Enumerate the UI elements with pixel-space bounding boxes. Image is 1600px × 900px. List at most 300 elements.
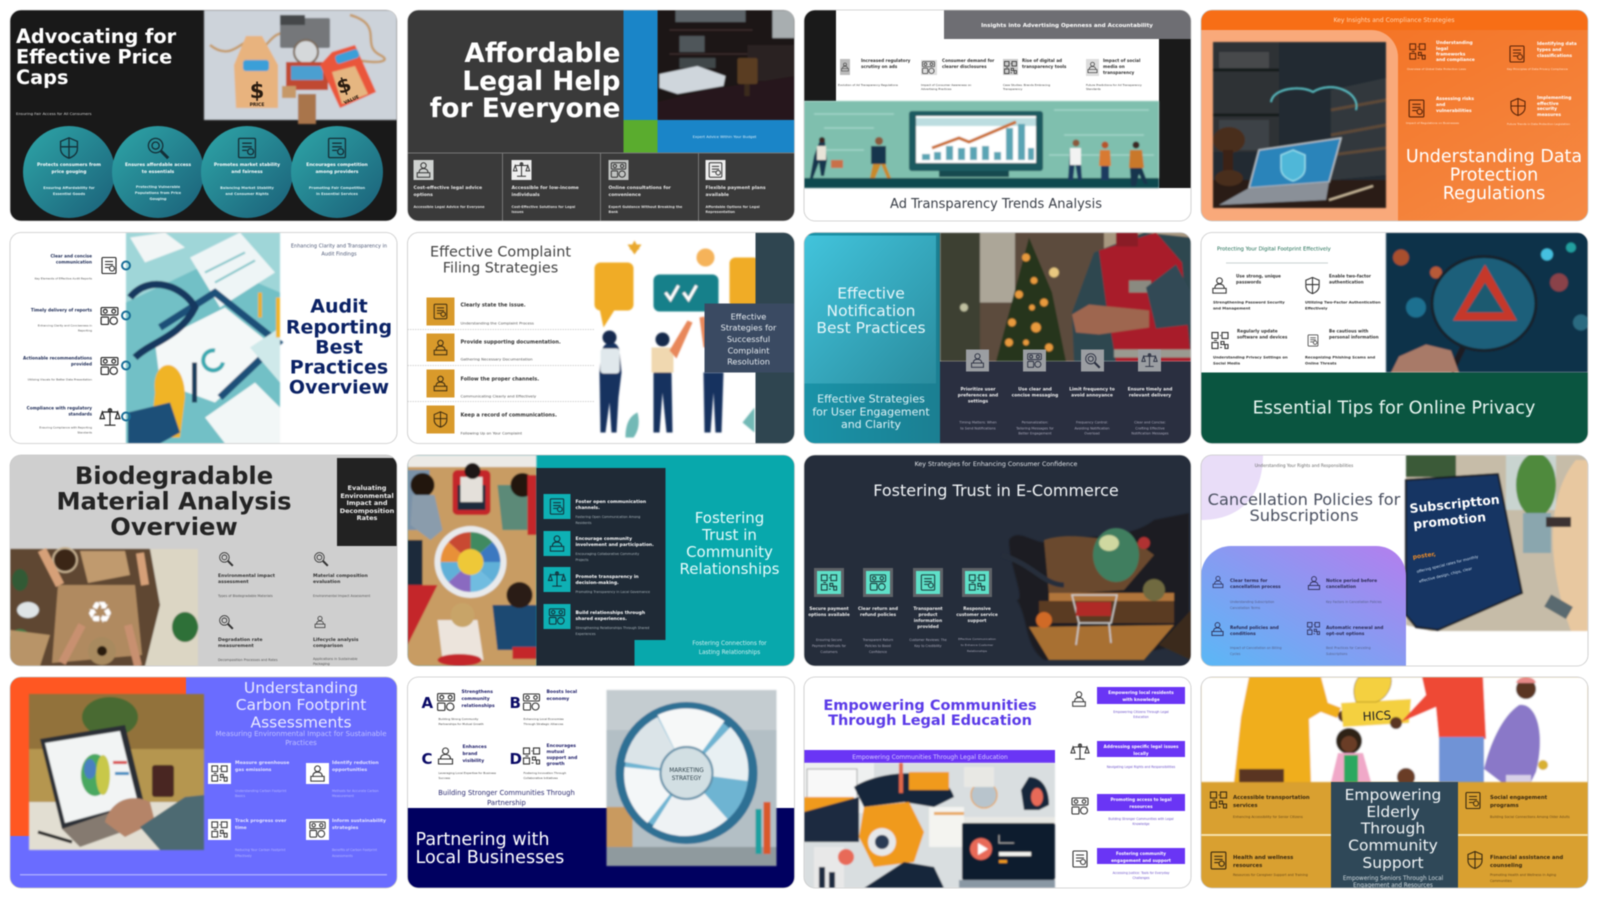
item: consumer demand <box>921 58 995 91</box>
subtitle: Expert Advice Within Your Budget <box>693 134 757 139</box>
item: environmental assessment: Environmental impact <box>218 573 276 579</box>
item: risks: and <box>1436 102 1445 108</box>
item: shared experiences: Experiences <box>576 632 596 636</box>
subtitle: Effective Strategies <box>817 392 925 406</box>
title: Audit <box>310 296 368 318</box>
item C: brand visibility: brand <box>462 751 477 757</box>
item: social media: Standards <box>1086 87 1101 91</box>
header band <box>944 10 1191 39</box>
item: communication channels: Fostering Open Communication Among <box>576 515 640 519</box>
item: payment plans: Affordable Options for Legal <box>706 205 760 209</box>
item: timely delivery: Enhancing Clarity and Conciseness in <box>38 324 92 328</box>
panel: Effective Notification Best Practices <box>804 232 1191 444</box>
illustration: analytics monitor with shoppers <box>804 101 1159 188</box>
tag labels: $ <box>250 79 264 103</box>
item: data types: types and <box>1537 47 1561 53</box>
title: Fostering <box>695 509 764 527</box>
item: refund policies: Impact of Cancellation on Billing <box>1230 646 1282 650</box>
item: reduction opportunities: Measurement <box>332 794 355 798</box>
item: personal info: Online Threats <box>1305 360 1337 366</box>
item: frequency: Overload <box>1084 432 1100 436</box>
wheel label: MARKETING <box>669 768 704 774</box>
header band: Insights into Advertising Openness and Accountability <box>981 23 1153 29</box>
item: lifecycle: Packaging <box>313 662 330 666</box>
item C: brand visibility: Enhances <box>462 744 487 750</box>
title: Caps <box>16 66 68 89</box>
item: notice period <box>1308 577 1382 604</box>
item: product information: Customer Reviews: The <box>909 638 947 642</box>
item: specific legal issues <box>1071 741 1185 769</box>
callout box: Successful <box>727 334 770 344</box>
item: community involvement: Encouraging Collaborative Community <box>576 552 639 556</box>
item: greenhouse gas: gas emissions <box>235 767 272 773</box>
callout box <box>704 304 794 372</box>
item B: local economy: B <box>510 694 521 712</box>
circle: access: Populations from Price <box>135 191 182 195</box>
circle: competition: Promoting Fair Competition <box>309 186 366 190</box>
item: recommendations: Utilizing Visuals for Better Data Presentation <box>28 378 92 382</box>
title: Overview <box>289 376 389 398</box>
central title panel: Engagement and Resources <box>1353 883 1433 889</box>
item: transparency: Promote transparency in <box>576 574 639 580</box>
photo: law office <box>658 10 794 120</box>
item: social media <box>1086 58 1142 91</box>
tag labels: $ <box>334 72 354 99</box>
item: auto renewal: opt-out options <box>1326 631 1365 637</box>
item: record <box>426 406 557 436</box>
item: product information: information <box>914 618 942 624</box>
HICS label: HICS <box>1362 708 1392 724</box>
item: transportation: Accessible transportation <box>1233 795 1310 801</box>
item: social media: Future Predictions for Ad Transparency <box>1086 83 1142 87</box>
item: timely delivery: Timely delivery of reports <box>31 308 92 312</box>
item A: community relationships: community <box>462 696 490 702</box>
circle: stability: Promotes market stability <box>214 162 280 168</box>
circle: price gouging: price gouging <box>52 169 86 175</box>
callout box: Effective <box>731 312 766 322</box>
item: preferences: Timing Matters: When <box>958 420 997 424</box>
item: preferences <box>958 350 998 430</box>
item: sustainability strategies <box>306 818 386 858</box>
panel: Audit Reporting Best Practices <box>10 232 397 444</box>
subtitle: Practices <box>285 739 317 747</box>
item: degradation: measurement <box>218 643 255 649</box>
item D: mutual support: growth <box>546 761 565 767</box>
panel: Ad Transparency Trends Analysis <box>804 10 1191 221</box>
item: degradation: Degradation rate <box>218 637 262 643</box>
item: auto renewal: Subscriptions <box>1326 652 1348 656</box>
panel: Understanding Carbon Footprint Assessments <box>10 677 397 888</box>
title: Essential Tips for Online Privacy <box>1253 398 1535 418</box>
item: low-income <box>512 160 579 214</box>
subtitle: Fostering Connections for <box>692 641 767 647</box>
item: timely delivery: Reporting <box>78 328 92 332</box>
item: refund policies: Cycles <box>1230 652 1241 656</box>
circle: access: Ensures affordable access <box>125 162 191 168</box>
item: risks: vulnerabilities <box>1436 108 1472 114</box>
tablet text: promotion <box>1412 509 1487 532</box>
circle: competition: among providers <box>316 169 359 175</box>
item: online consultations: convenience <box>608 192 641 198</box>
subtitle: for User Engagement <box>812 406 930 418</box>
central title panel: Elderly <box>1366 803 1420 821</box>
item: risks: Impact of Regulations on Businesses <box>1406 121 1460 125</box>
item: passwords <box>1213 274 1285 310</box>
item: update software <box>1212 328 1288 366</box>
item: local residents: Education <box>1133 715 1149 719</box>
item: secure payment: Customers <box>820 650 838 654</box>
item: specific legal issues: locally <box>1133 751 1149 756</box>
item: payment plans: available <box>706 192 729 198</box>
panel: Advocating for Effective Price Caps <box>10 10 397 221</box>
title: Fostering Trust in E-Commerce <box>873 481 1119 500</box>
item: notice period: cancellation <box>1326 584 1356 590</box>
item: clear terms: Understanding Subscription <box>1230 600 1274 604</box>
subtitle: Audit Findings <box>321 252 357 258</box>
item: social programs: Building Social Connections Among Older Adults <box>1490 815 1570 819</box>
subtitle: Understanding Your Rights and Responsibilities <box>1255 463 1353 468</box>
circle: competition: Encourages competition <box>306 162 368 168</box>
item: online consultations <box>608 160 683 214</box>
title: Cancellation Policies for <box>1208 490 1401 509</box>
item: data types: classifications <box>1537 53 1572 59</box>
panel: Fostering Trust in Community Relationships <box>408 455 794 666</box>
item: legal frameworks: frameworks <box>1436 52 1466 58</box>
item D: mutual support: mutual <box>546 749 565 755</box>
item: product information: Key to Credibility <box>914 644 942 648</box>
tablet text: effective design, chips, clear <box>1418 566 1473 584</box>
item: messaging: Better Engagement <box>1018 432 1052 436</box>
item: passwords: Use strong, unique <box>1236 274 1281 278</box>
item: financial assistance: Financial assistance and <box>1490 855 1563 861</box>
item: low-income: Issues <box>512 210 524 214</box>
item: return policies: Clear return and <box>858 606 898 612</box>
item: two-factor <box>1305 274 1381 310</box>
title: Notification <box>827 302 915 320</box>
title: Empowering Communities <box>823 698 1037 714</box>
subtitle: Ensuring Fair Access for All Consumers <box>16 111 92 116</box>
callout box: Strategies for <box>721 322 777 332</box>
item: degradation: Decomposition Processes and Rates <box>218 658 278 662</box>
item: customer support: to Enhance Customer <box>961 643 994 647</box>
item: shared experiences <box>544 604 649 636</box>
item: social programs <box>1466 792 1570 819</box>
item: social media: media on <box>1103 64 1125 69</box>
item: wellness <box>1211 852 1308 877</box>
side callout: Environmental <box>340 492 394 500</box>
item: preferences: preferences and <box>958 392 998 398</box>
title: Trust in <box>701 526 757 544</box>
item: compliance: Ensuring Compliance with Reporting <box>39 426 92 430</box>
item: timely delivery <box>31 308 130 332</box>
tablet text: Subscriptton <box>1409 492 1500 516</box>
item: compliance: Compliance with regulatory <box>27 406 92 410</box>
item D: mutual support: Encourages <box>546 743 576 749</box>
item: state issue <box>426 298 534 326</box>
title: Overview <box>110 513 238 541</box>
item: community involvement: involvement and participation. <box>576 542 654 548</box>
item: update software: Understanding Privacy Settings on <box>1213 354 1288 360</box>
panel: Effective Complaint Filing Strategies <box>408 232 794 444</box>
item: refund policies: conditions <box>1230 631 1256 637</box>
item: low-income: individuals <box>512 192 540 198</box>
item: transportation <box>1210 792 1310 819</box>
item: auto renewal: Automatic renewal and <box>1326 625 1383 631</box>
item: community involvement: Projects <box>576 558 589 562</box>
item: local residents <box>1073 687 1185 719</box>
item: engagement: Accessing Justice: Tools for Everyday <box>1113 871 1170 875</box>
item: financial assistance: Promoting Health and Wellness in Aging <box>1490 873 1556 877</box>
item: timely delivery: Notification Messages <box>1131 432 1169 436</box>
item: passwords: passwords <box>1236 280 1262 284</box>
title: for Everyone <box>430 93 620 124</box>
item: consumer demand: Consumer demand for <box>942 58 995 63</box>
subtitle: Enhancing Clarity and Transparency in <box>291 244 387 250</box>
item C: brand visibility: C <box>422 750 433 768</box>
item: customer support: customer service <box>956 612 998 618</box>
item B: local economy: Through Strategic Alliances <box>522 722 564 726</box>
panel: Empowering Communities Through Legal Education <box>804 677 1191 888</box>
item: frequency: Avoiding Notification <box>1074 426 1110 430</box>
item: shared experiences: shared experiences. <box>576 616 627 622</box>
item: risks <box>1406 96 1474 125</box>
item: risks: Assessing risks <box>1436 96 1474 102</box>
item: sustainability strategies: Inform sustainability <box>332 818 386 824</box>
item: data types: Identifying data <box>1537 41 1577 47</box>
title: Reporting <box>286 316 392 338</box>
item: consumer demand: Advertising Practices <box>921 87 952 91</box>
circle: access: to essentials <box>142 169 175 175</box>
photo: worker with christmas tree <box>940 232 1191 362</box>
item: security measures <box>1507 95 1571 126</box>
wheel label: STRATEGY <box>672 776 702 782</box>
item: social programs: programs <box>1490 803 1519 809</box>
item: reduction opportunities <box>306 760 379 798</box>
title: Local Businesses <box>416 848 564 868</box>
item C: brand visibility <box>422 744 497 780</box>
illustration: globe and cart in swoosh <box>1002 513 1191 660</box>
item: customer support: Responsive <box>963 606 991 612</box>
item: legal resources <box>1072 794 1185 826</box>
item: consumer demand: clearer disclosures <box>942 64 987 69</box>
circle: access: Protecting Vulnerable <box>136 185 181 189</box>
title: Carbon Footprint <box>236 696 366 714</box>
title: Assessments <box>250 714 352 732</box>
title: Understanding <box>244 679 358 697</box>
item: frequency: avoid annoyance <box>1071 392 1113 398</box>
item: low-income: Accessible for low-income <box>512 185 579 191</box>
panel: Biodegradable Material Analysis <box>8 455 397 666</box>
item: record: Following Up on Your Complaint <box>460 430 523 436</box>
item: frequency: Limit frequency to <box>1069 386 1115 392</box>
item: local residents: with knowledge <box>1122 697 1160 702</box>
central title panel <box>1331 782 1458 889</box>
item: legal resources: Knowledge <box>1132 822 1150 826</box>
item: customer support: support <box>968 618 986 624</box>
title: Best <box>315 336 363 358</box>
item: proper channels: Communicating Clearly and Effectively <box>460 394 537 398</box>
item: return policies: refund policies <box>860 612 896 618</box>
item: product information: Transparent <box>913 606 943 612</box>
subtitle: Measuring Environmental Impact for Sustainable <box>215 730 387 738</box>
panel: Empowering Elderly Through Community Support <box>1201 677 1588 889</box>
item: reduction opportunities: Identify reduction <box>332 760 379 766</box>
title: Regulations <box>1443 184 1545 204</box>
band subtitle <box>804 750 1055 763</box>
item: sustainability strategies: strategies <box>332 825 359 831</box>
item: personal info: Recognizing Phishing Scams and <box>1305 354 1375 360</box>
illustration: team with chat bubbles <box>594 240 760 438</box>
circle: price gouging <box>23 126 115 218</box>
subtitle: Protecting Your Digital Footprint Effectively <box>1217 246 1331 252</box>
item: lifecycle: comparison <box>313 643 343 649</box>
item: composition: Material composition <box>313 573 368 579</box>
item: timely delivery: Ensure timely and <box>1128 386 1172 392</box>
item: timely delivery <box>1128 350 1172 436</box>
item: documentation: Gathering Necessary Documentation <box>460 356 533 362</box>
circle: stability: and fairness <box>231 169 263 175</box>
item: preferences: settings <box>968 398 988 404</box>
item: financial assistance <box>1468 852 1563 883</box>
item: communication channels: Foster open communication <box>576 499 646 505</box>
item: timely delivery: relevant delivery <box>1129 392 1171 398</box>
circle: price gouging: Protects consumers from <box>37 162 101 168</box>
item: clear terms: Cancellation Terms <box>1230 606 1260 610</box>
item: greenhouse gas: Measure greenhouse <box>235 760 289 766</box>
item: environmental assessment: assessment <box>218 579 249 585</box>
central title panel: Support <box>1362 854 1424 872</box>
item: update software: software and devices <box>1237 334 1288 340</box>
item: regulatory scrutiny: scrutiny on ads <box>861 64 898 69</box>
item: composition: evaluation <box>313 579 340 585</box>
title: Biodegradable <box>75 462 273 490</box>
item: environmental assessment: Types of Biodegradable Materials <box>217 594 273 598</box>
title: Affordable <box>464 38 620 69</box>
item A: community relationships: A <box>422 694 434 712</box>
item: track progress: Reducing Your Carbon Footprint <box>235 848 286 852</box>
item: refund policies: Refund policies and <box>1230 625 1279 631</box>
item: local residents: Empowering Citizens Through Legal <box>1113 710 1169 714</box>
item: clear communication: Clear and concise <box>50 254 92 258</box>
item D: mutual support: D <box>510 750 522 768</box>
item: secure payment: Payment Methods for <box>812 644 847 648</box>
photo: hands over recycled packaging: ♻ <box>87 596 113 631</box>
item A: community relationships: Partnerships for Mutual Growth <box>438 722 484 726</box>
header band <box>1201 10 1588 30</box>
item: regulatory scrutiny <box>838 58 911 87</box>
item: degradation <box>218 616 278 662</box>
item: messaging: Personalization: <box>1022 420 1048 424</box>
item: passwords: and Management <box>1213 306 1250 310</box>
item B: local economy: Enhancing Local Economies <box>524 717 564 721</box>
photo: hands over recycled packaging <box>8 548 198 666</box>
item: recommendations <box>23 356 130 382</box>
item: greenhouse gas: Basics <box>235 794 245 798</box>
callout box: Resolution <box>727 356 770 366</box>
item: messaging: Tailoring Messages for <box>1015 426 1054 430</box>
item: data types <box>1507 41 1577 71</box>
item: clear communication <box>35 254 130 280</box>
central title panel: Through <box>1360 820 1425 838</box>
item: digital tools <box>1002 58 1067 91</box>
item: track progress: Effectively <box>235 854 252 858</box>
item: notice period: Key Factors in Cancellation Policies <box>1326 600 1382 604</box>
item: personal info: personal information <box>1329 334 1379 340</box>
item: legal frameworks: legal <box>1436 46 1449 52</box>
item: payment plans: Representation <box>706 210 736 214</box>
item C: brand visibility: visibility <box>462 758 484 764</box>
circle: competition: in Essential Services <box>316 192 358 196</box>
item: messaging: concise messaging <box>1012 392 1058 398</box>
photo: marketing strategy wheel <box>606 690 776 866</box>
item: update software: Social Media <box>1213 360 1240 366</box>
callout box: Complaint <box>728 346 770 356</box>
subtitle: Lasting Relationships <box>699 650 760 656</box>
item: return policies: Transparent Return <box>862 638 893 642</box>
item: messaging <box>1012 350 1058 436</box>
tablet text: poster, <box>1412 551 1436 561</box>
circle: access: Gouging <box>150 197 167 201</box>
item: security measures: measures <box>1537 112 1561 118</box>
item: legal frameworks: Overview of Global Data Protection Laws <box>1407 67 1466 71</box>
item: documentation <box>426 334 561 362</box>
item: reduction opportunities: Methods for Accurate Carbon <box>332 789 379 793</box>
item: online consultations: Online consultations for <box>608 185 672 191</box>
item: clear terms: Clear terms for <box>1230 578 1268 584</box>
subtitle: Partnership <box>487 799 526 807</box>
side callout: Rates <box>357 514 378 522</box>
item: transparency: decision-making. <box>576 580 619 586</box>
circle: competition <box>291 126 383 218</box>
colour blocks <box>624 10 794 153</box>
item: composition <box>313 553 371 598</box>
item: product information: product <box>919 612 937 618</box>
title: Relationships <box>680 560 780 578</box>
dark content panel <box>536 468 666 666</box>
decorative lilac shape <box>1201 455 1263 520</box>
tag labels: PRICE <box>250 102 264 108</box>
item: shared experiences: Strengthening Relationships Through Shared <box>576 626 649 630</box>
item A: community relationships <box>422 689 495 726</box>
subtitle: Building Stronger Communities Through <box>438 789 575 797</box>
tag labels <box>249 76 360 107</box>
central title panel: Empowering Seniors Through Local <box>1343 876 1444 882</box>
item: track progress: Track progress over <box>235 818 287 824</box>
item: recommendations: Actionable recommendations <box>23 356 93 360</box>
item: transparency <box>544 567 650 594</box>
item: digital tools: transparency tools <box>1022 64 1067 69</box>
item: community involvement: Encourage community <box>576 536 632 542</box>
item: community involvement <box>544 531 654 562</box>
title: Best Practices <box>816 319 926 337</box>
item C: brand visibility: Leveraging Local Expertise for Business <box>438 771 497 775</box>
central title panel: Empowering <box>1345 786 1441 804</box>
title: Through Legal Education <box>828 713 1032 729</box>
title: Advocating for <box>16 25 177 48</box>
item: social media: transparency <box>1103 70 1135 75</box>
item: composition: Environmental Impact Assessment <box>313 594 371 598</box>
item D: mutual support: support and <box>546 755 577 761</box>
title: Partnering with <box>416 830 550 850</box>
title: Effective <box>837 284 905 302</box>
item: wellness: Health and wellness <box>1233 855 1293 861</box>
item: recommendations: provided <box>71 362 92 366</box>
item: regulatory scrutiny: Increased regulatory <box>861 58 911 63</box>
item: engagement: engagement and support <box>1111 858 1171 863</box>
item: engagement: Fostering community <box>1116 851 1166 856</box>
item: clear terms: cancellation process <box>1230 584 1281 590</box>
item: legal advice: Cost-effective legal advice <box>414 185 482 191</box>
